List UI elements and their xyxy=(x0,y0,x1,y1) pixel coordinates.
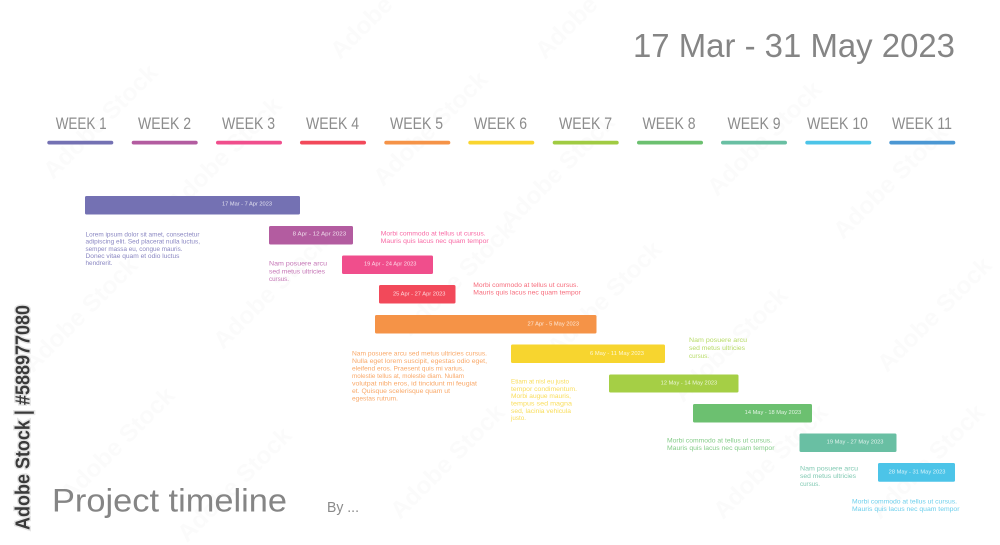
bar: 12 May - 14 May 2023 xyxy=(609,374,738,392)
week 1: WEEK 1 xyxy=(56,115,107,133)
notes xyxy=(86,230,960,513)
week 4: WEEK 4 xyxy=(306,115,359,133)
bar: 25 Apr - 27 Apr 2023: 25 Apr - 27 Apr 2023 xyxy=(393,291,446,297)
note: orange paragraph: molestie tellus at, molestie diam. Nullam xyxy=(352,373,464,380)
note: green xyxy=(667,438,775,452)
project timeline infographic: Adobe Stock xyxy=(702,76,828,201)
project timeline infographic: Adobe Stock xyxy=(708,399,834,524)
note: week 1 description: hendrerit. xyxy=(86,260,113,267)
note: lime: cursus. xyxy=(689,353,709,360)
bar: 27 Apr - 5 May 2023 xyxy=(375,315,596,334)
week 6: WEEK 6 xyxy=(474,115,527,133)
note: blue xyxy=(852,498,960,513)
project timeline infographic: Adobe Stock xyxy=(385,399,511,524)
note: orange paragraph: egestas rutrum. xyxy=(352,396,398,403)
bar: 14 May - 18 May 2023: 14 May - 18 May 2023 xyxy=(745,410,801,416)
week 8 xyxy=(637,115,703,144)
project timeline infographic: Adobe Stock xyxy=(18,252,144,377)
bar: 12 May - 14 May 2023: 12 May - 14 May 2023 xyxy=(661,380,717,386)
note: yellow paragraph: justo. xyxy=(510,415,526,422)
note: lime xyxy=(689,337,747,360)
bar: 28 May - 31 May 2023: 28 May - 31 May 2023 xyxy=(889,469,946,475)
note: green: Mauris quis lacus nec quam tempor xyxy=(667,445,775,452)
note: blue: Morbi commodo at tellus ut cursus. xyxy=(852,498,957,505)
bar: 19 May - 27 May 2023 xyxy=(800,434,896,452)
note: pink xyxy=(381,230,489,245)
week header row xyxy=(47,115,955,144)
project timeline infographic: Adobe Stock xyxy=(865,399,991,524)
week 9 xyxy=(721,115,787,144)
note: red: Mauris quis lacus nec quam tempor xyxy=(473,289,582,296)
note: week 1 description: Donec vitae quam et odio luctus xyxy=(86,253,180,260)
note: yellow paragraph: Morbi augue mauris, xyxy=(511,393,571,400)
note: green: Morbi commodo at tellus ut cursus. xyxy=(667,438,772,445)
week 2 xyxy=(132,115,198,144)
week 4 xyxy=(300,115,366,144)
week 2: WEEK 2 xyxy=(138,115,191,133)
week 6 xyxy=(468,115,534,144)
note: yellow paragraph xyxy=(510,378,577,422)
note: blue: Mauris quis lacus nec quam tempor xyxy=(852,506,960,513)
note: week 1 description: semper massa eu, congue mauris. xyxy=(86,246,183,253)
project timeline infographic: Adobe Stock xyxy=(368,66,494,191)
bar: 8 Apr - 12 Apr 2023: 8 Apr - 12 Apr 2023 xyxy=(293,232,346,238)
note: purple: cursus. xyxy=(269,276,289,283)
bar: 19 May - 27 May 2023: 19 May - 27 May 2023 xyxy=(827,440,884,446)
note: lime: Nam posuere arcu xyxy=(689,337,747,344)
bar: 8 Apr - 12 Apr 2023 xyxy=(269,226,353,244)
bar: 28 May - 31 May 2023 xyxy=(878,463,955,482)
project timeline infographic: Adobe Stock xyxy=(395,216,521,341)
note: week 1 description: Lorem ipsum dolor sit amet, consectetur xyxy=(86,231,200,238)
note: teal xyxy=(800,465,858,488)
heading: date range: 17 Mar - 31 May 2023 xyxy=(633,27,955,64)
project timeline infographic: Adobe Stock xyxy=(55,382,181,507)
gantt bars xyxy=(85,196,955,482)
week 1 xyxy=(47,115,113,144)
note: red: Morbi commodo at tellus ut cursus. xyxy=(473,282,578,289)
week 10: WEEK 10 xyxy=(807,115,868,133)
note: orange paragraph: et. Quisque scelerisque quam ut xyxy=(352,388,450,395)
week 10 xyxy=(805,115,871,144)
note: orange paragraph: volutpat nibh eros, id tincidunt mi feugiat xyxy=(352,380,477,387)
title: project timeline: Project timeline xyxy=(52,482,287,518)
week 7: WEEK 7 xyxy=(559,115,612,133)
bar: 17 Mar - 7 Apr 2023: 17 Mar - 7 Apr 2023 xyxy=(222,202,272,208)
project timeline infographic: Adobe Stock xyxy=(872,252,998,377)
bar: 19 Apr - 24 Apr 2023 xyxy=(342,256,433,274)
note: orange paragraph: Nulla eget lorem suscipit, egestas odio eget, xyxy=(352,358,487,365)
bar: 14 May - 18 May 2023 xyxy=(693,404,812,422)
note: yellow paragraph: sed, lacinia vehicula xyxy=(511,408,571,415)
project timeline infographic: Adobe Stock xyxy=(162,92,288,217)
note: purple: Nam posuere arcu xyxy=(269,260,327,267)
bar: 19 Apr - 24 Apr 2023: 19 Apr - 24 Apr 2023 xyxy=(364,262,416,268)
week 11: WEEK 11 xyxy=(892,115,952,133)
week 5 xyxy=(384,115,450,144)
note: teal: cursus. xyxy=(800,481,820,488)
note: orange paragraph xyxy=(352,351,487,403)
note: orange paragraph: Nam posuere arcu sed metus ultricies cursus. xyxy=(352,351,487,358)
project timeline infographic: Adobe Stock xyxy=(668,282,794,407)
project timeline infographic: Adobe Stock xyxy=(495,109,621,234)
byline: By ... xyxy=(327,499,359,516)
bar: 25 Apr - 27 Apr 2023 xyxy=(379,285,456,304)
note: purple: sed metus ultricies xyxy=(269,268,326,275)
note: pink: Mauris quis lacus nec quam tempor xyxy=(381,238,489,245)
week 3: WEEK 3 xyxy=(222,115,275,133)
note: lime: sed metus ultricies xyxy=(689,345,746,352)
week 8: WEEK 8 xyxy=(642,115,696,133)
note: yellow paragraph: Etiam at nisl eu justo xyxy=(511,378,569,385)
bar: 17 Mar - 7 Apr 2023 xyxy=(85,196,300,214)
week 3 xyxy=(216,115,282,144)
bar: 6 May - 11 May 2023: 6 May - 11 May 2023 xyxy=(590,351,644,357)
note: week 1 description: adipiscing elit. Sed placerat nulla luctus, xyxy=(86,238,200,246)
note: week 1 description xyxy=(86,231,200,267)
project timeline infographic: Adobe Stock xyxy=(38,59,164,184)
week 11 xyxy=(889,115,955,144)
note: yellow paragraph: tempor condimentum. xyxy=(511,386,577,393)
bar: 6 May - 11 May 2023 xyxy=(511,344,665,363)
note: red xyxy=(473,282,582,296)
project timeline infographic: Adobe Stock xyxy=(172,422,298,545)
stock id vertical text: Adobe Stock | #588977080 xyxy=(12,305,34,530)
project timeline infographic: Adobe Stock xyxy=(828,119,954,244)
project timeline infographic: Adobe Stock xyxy=(542,236,668,361)
note: orange paragraph: eleifend eros. Praesent quis mi varius, xyxy=(352,366,464,372)
note: yellow paragraph: tempus sed magna xyxy=(511,400,572,407)
note: teal: sed metus ultricies xyxy=(800,473,857,480)
note: teal: Nam posuere arcu xyxy=(800,465,858,472)
note: pink: Morbi commodo at tellus ut cursus. xyxy=(381,230,486,237)
week 7 xyxy=(553,115,619,144)
note: purple xyxy=(269,260,327,283)
week 5: WEEK 5 xyxy=(390,115,443,133)
bar: 27 Apr - 5 May 2023: 27 Apr - 5 May 2023 xyxy=(528,321,579,327)
project timeline infographic: Adobe Stock xyxy=(208,229,334,354)
week 9: WEEK 9 xyxy=(728,115,780,133)
